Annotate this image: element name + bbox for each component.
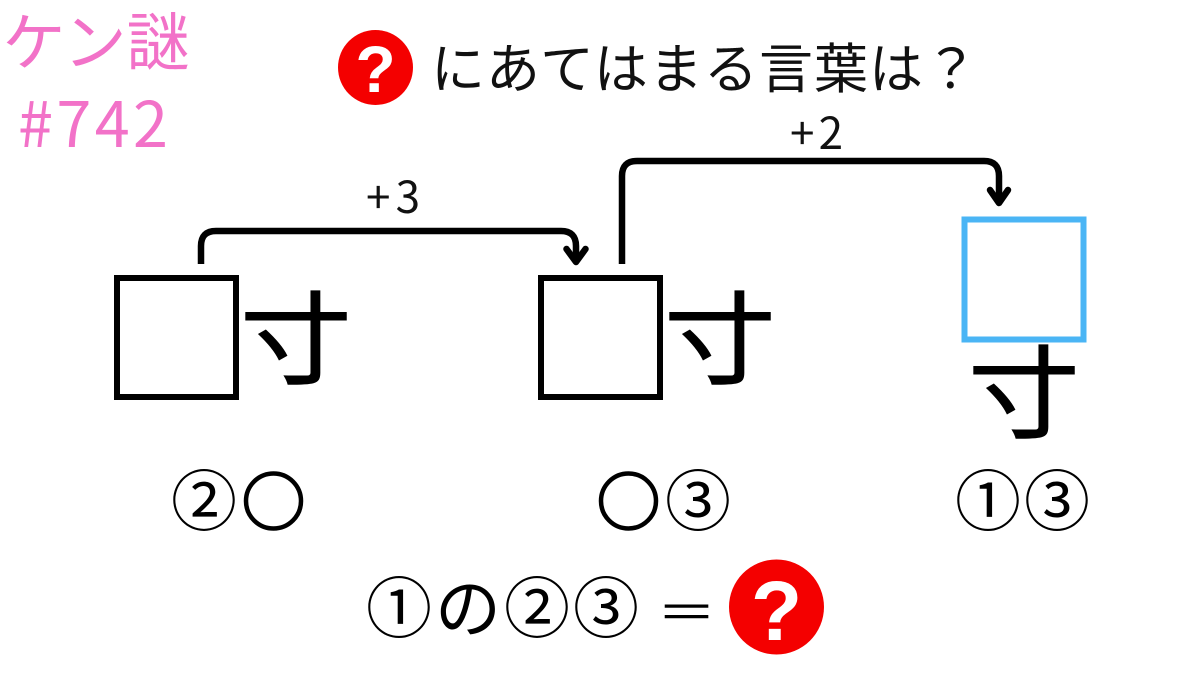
formula text: の <box>435 556 501 652</box>
label +3: +3 <box>366 162 420 226</box>
arrow: +2 <box>622 98 1008 264</box>
kanji tile 3 <box>964 220 1084 459</box>
caption: ○③: ③ <box>665 449 731 545</box>
answer box blue <box>964 220 1084 340</box>
empty box 1 <box>117 278 236 397</box>
title: puzzle number: #742 <box>18 75 168 166</box>
icon: red question mark <box>338 30 413 106</box>
caption: ①③: ③ <box>1024 449 1090 545</box>
formula text <box>366 556 717 652</box>
heading: question <box>338 25 978 106</box>
caption: ②○: ② <box>171 449 237 545</box>
caption: ①③ <box>955 449 1090 545</box>
formula text: ＝ <box>656 576 717 643</box>
caption: ○③ <box>601 449 731 545</box>
formula text: ② <box>504 556 570 652</box>
caption: ①③: ① <box>955 449 1021 545</box>
series title <box>2 0 190 166</box>
answer formula <box>366 556 824 658</box>
heading text: にあてはまる言葉は？ <box>431 25 978 104</box>
arrow path +2 <box>622 161 1008 264</box>
icon: red question mark: ? <box>751 564 802 658</box>
kanji 寸: 寸 <box>664 258 776 405</box>
kanji tile 1 <box>117 258 352 405</box>
empty box 2 <box>541 278 660 397</box>
kanji 寸: 寸 <box>240 258 352 405</box>
formula text: ① <box>366 556 432 652</box>
icon: red question mark: ? <box>355 32 396 106</box>
arrow: +3 <box>201 162 586 264</box>
label +2: +2 <box>790 98 843 162</box>
kanji tile 2 <box>541 258 776 405</box>
formula text: ③ <box>573 556 639 652</box>
arrow path +3 <box>201 231 586 264</box>
caption: ②○ <box>171 449 301 545</box>
kanji 寸: 寸 <box>968 312 1080 459</box>
icon: red question mark <box>729 560 824 658</box>
